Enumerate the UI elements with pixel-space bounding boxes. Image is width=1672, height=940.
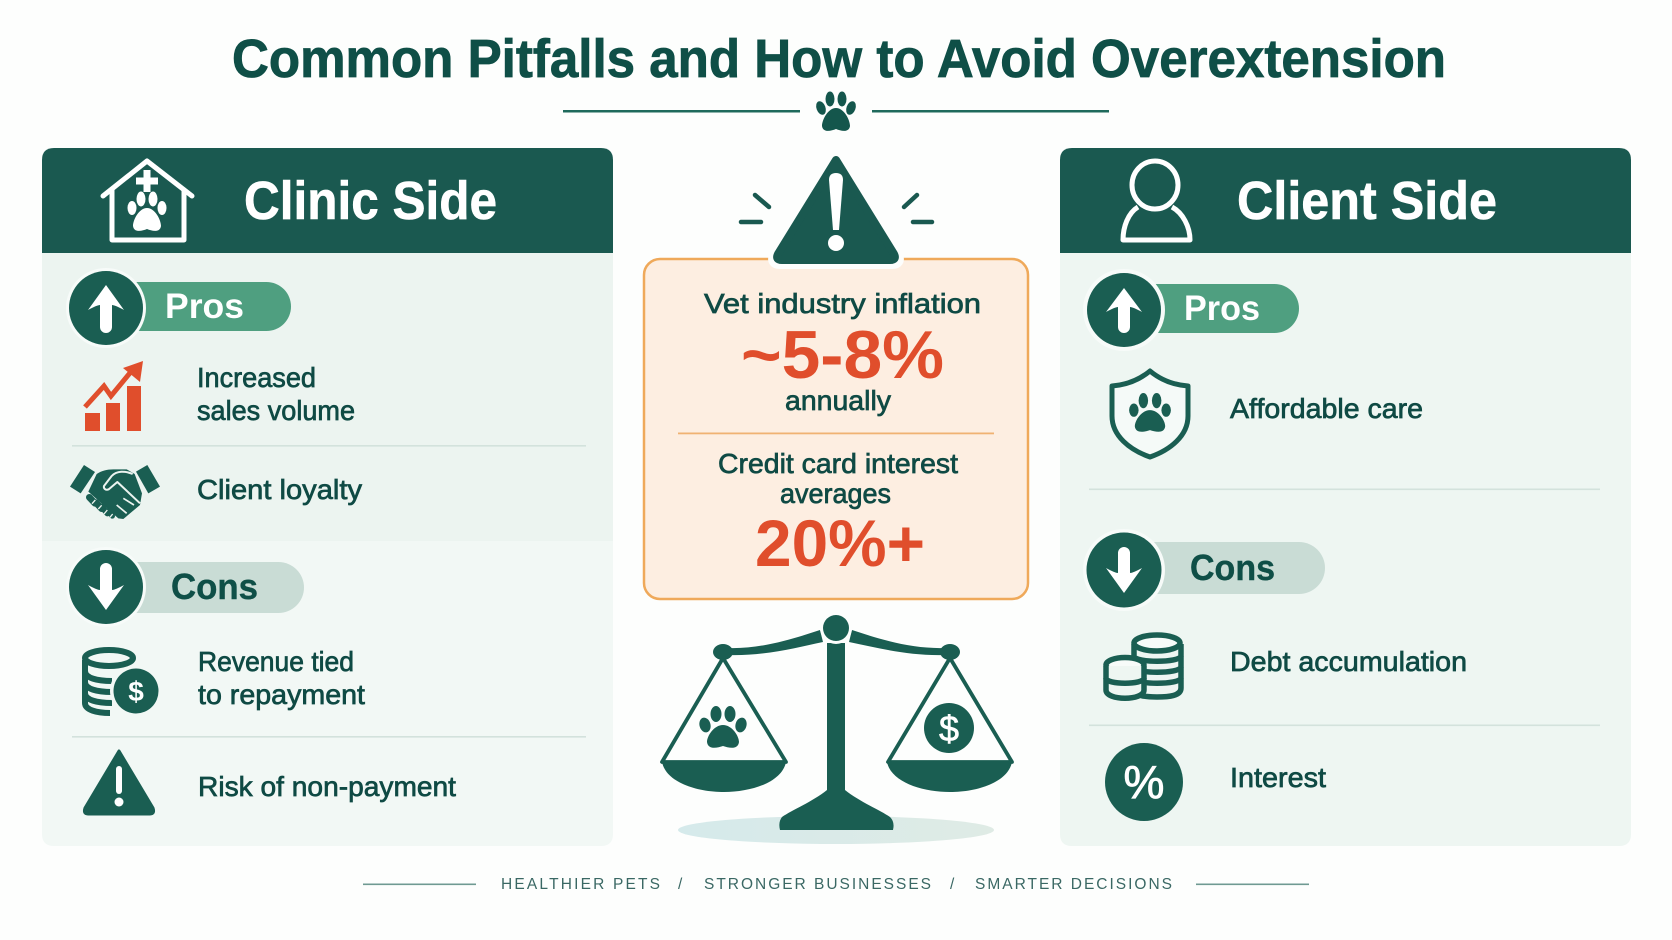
icon: person (1123, 161, 1190, 240)
right pan with dollar: $ (939, 708, 959, 749)
pros badge: Pros (1184, 289, 1260, 328)
text: revenue tied to repayment (198, 646, 365, 710)
text: debt accumulation: Debt accumulation (1230, 646, 1467, 677)
text: increased sales volume: sales volume (197, 395, 355, 426)
text: averages: averages (780, 478, 891, 509)
text: increased sales volume: Increased (197, 362, 316, 393)
pros badge: Pros (165, 287, 244, 326)
title: Common Pitfalls and How to Avoid Overextension (232, 29, 1446, 89)
icon: sales growth chart (85, 361, 143, 431)
icon: coins with dollar (85, 650, 162, 717)
cons badge (1083, 529, 1325, 611)
text: vet inflation label: Vet industry inflation (704, 288, 981, 319)
text: annually: annually (785, 385, 891, 416)
stat: inflation percent: ~5-8% (741, 317, 944, 393)
text: revenue tied to repayment: Revenue tied (198, 646, 354, 677)
footer tagline: STRONGER BUSINESSES (704, 876, 931, 893)
pros badge (66, 268, 291, 348)
footer tagline: / (678, 876, 683, 893)
icon: alert triangle (741, 160, 932, 262)
cons badge: Cons (171, 566, 258, 607)
stat: credit card interest: 20%+ (755, 506, 925, 580)
icon: percent circle (1105, 743, 1183, 821)
title divider with paw (563, 92, 1109, 131)
right pan with dollar (887, 658, 1012, 792)
heading: client side: Client Side (1237, 171, 1497, 231)
heading: clinic side: Clinic Side (244, 171, 497, 231)
icon: title paw (814, 92, 858, 131)
pros badge (1083, 269, 1299, 351)
panel: clinic side (42, 148, 613, 846)
text: credit card label: Credit card interest (718, 448, 958, 479)
cons badge: Cons (1190, 547, 1275, 588)
icon: warning triangle (84, 751, 154, 814)
text: affordable care: Affordable care (1230, 393, 1423, 424)
icon: coins with dollar: $ (128, 676, 144, 707)
text: revenue tied to repayment: to repayment (198, 679, 365, 710)
text: increased sales volume (197, 362, 355, 426)
text: client loyalty: Client loyalty (197, 474, 362, 505)
footer tagline: HEALTHIER PETS (501, 876, 660, 893)
icon: handshake (70, 465, 160, 519)
stats box (644, 259, 1028, 599)
text: interest: Interest (1230, 762, 1326, 793)
icon: clinic house (103, 161, 192, 240)
icon: debt coin stacks (1106, 635, 1181, 698)
icon: shield with paw (1112, 371, 1188, 457)
icon: balance scale (662, 612, 1012, 844)
panel: client side (1060, 148, 1631, 846)
footer tagline (363, 876, 1309, 893)
footer tagline: / (950, 876, 955, 893)
left pan with paw (662, 658, 786, 792)
footer tagline: SMARTER DECISIONS (975, 876, 1172, 893)
cons badge (66, 547, 304, 627)
icon: percent circle: % (1124, 756, 1164, 808)
text: risk of non-payment: Risk of non-payment (198, 771, 456, 802)
